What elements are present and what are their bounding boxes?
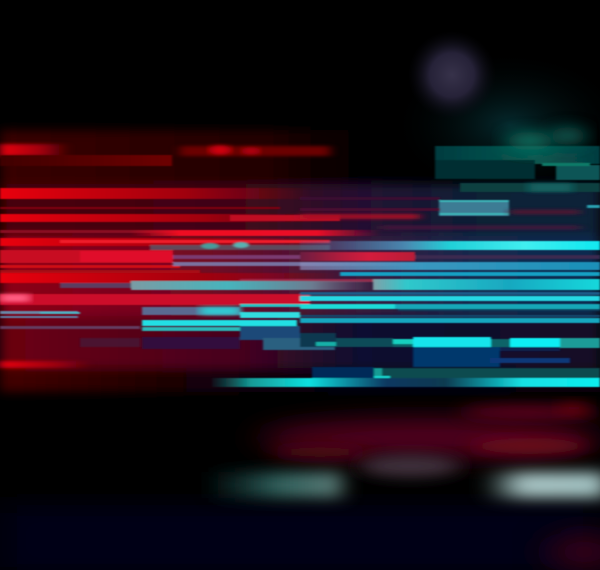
glow: night sky orb (390, 31, 600, 200)
panel: main red streaks (0, 188, 580, 368)
panel: upper teal blocks (435, 127, 600, 216)
panel: blurred bottom reflections (0, 405, 600, 570)
panel: top red streaks (0, 144, 330, 166)
panel: all horizontal streaks (0, 127, 600, 387)
panel: base colour field (0, 130, 600, 392)
panel: right cyan streaks (300, 241, 600, 323)
panel: right bright cyan blocks (393, 337, 600, 367)
panel: centre cyan blocks (80, 304, 393, 350)
panel: bottom cyan bar (212, 367, 600, 387)
panel: mid grey-teal bars (60, 242, 600, 290)
